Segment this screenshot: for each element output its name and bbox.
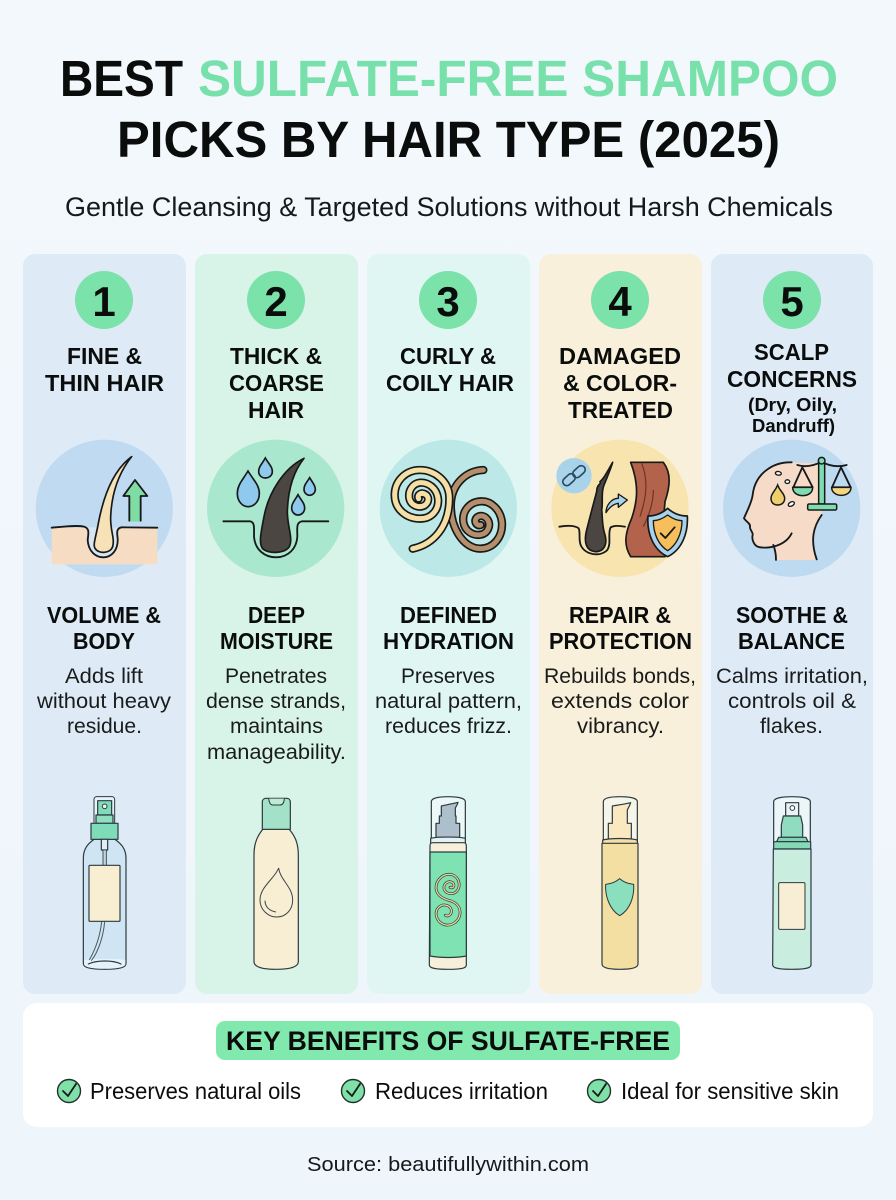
number badge 4 (591, 271, 649, 329)
icon: coarse hair with water drops (207, 440, 344, 577)
title: SULFATE-FREE SHAMPOO (198, 50, 838, 107)
description: maintains (230, 714, 323, 738)
description (544, 664, 696, 738)
subheading: defined hydration (383, 602, 514, 654)
subheading: deep moisture: DEEP (248, 602, 305, 628)
heading: thick and coarse hair (229, 343, 324, 423)
subheading: repair and protection: PROTECTION (549, 628, 692, 654)
icon: hair follicle with volume arrow (36, 440, 173, 577)
icon: damaged hair, color swatch and shield (551, 440, 689, 577)
number badge 5: 5 (780, 278, 804, 325)
description: extends color (551, 689, 689, 713)
heading: fine and thin hair: FINE & (67, 343, 142, 369)
description: without heavy (36, 689, 171, 713)
subheading: defined hydration: DEFINED (400, 602, 497, 628)
description: Calms irritation, (716, 664, 868, 688)
source line: Source: beautifullywithin.com (307, 1154, 589, 1176)
description: vibrancy. (577, 714, 664, 738)
subheading: repair and protection (549, 602, 692, 654)
heading: fine and thin hair (45, 343, 164, 396)
subheading: volume and body: VOLUME & (47, 602, 161, 628)
number badge 1: 1 (92, 278, 116, 325)
heading: scalp concerns: (Dry, Oily, (748, 394, 837, 415)
description: dense strands, (206, 689, 346, 713)
subheading: soothe and balance (736, 602, 848, 654)
description (375, 664, 522, 738)
heading: thick and coarse hair: HAIR (248, 397, 304, 423)
description: flakes. (760, 714, 823, 738)
subheading: repair and protection: REPAIR & (569, 602, 671, 628)
benefit: preserves natural oils: Preserves natural oils (90, 1078, 301, 1104)
bottle: cream with drop (254, 798, 298, 969)
panel: curly and coily hair (367, 254, 530, 994)
bottle: mint spray (773, 797, 811, 969)
subheading: deep moisture (220, 602, 333, 654)
heading: fine and thin hair: THIN HAIR (45, 370, 164, 396)
description (36, 664, 171, 738)
description: reduces frizz. (385, 714, 512, 738)
description: manageability. (207, 740, 346, 764)
bottle: golden pump with shield (602, 797, 638, 969)
heading: scalp concerns: CONCERNS (727, 366, 857, 392)
description (206, 664, 346, 764)
icon: head profile with balance scale (723, 440, 860, 577)
title: BEST (60, 50, 183, 107)
description: Penetrates (225, 664, 327, 688)
subheading: volume and body (47, 602, 161, 654)
description: Rebuilds bonds, (544, 664, 696, 688)
description: Preserves (401, 664, 495, 688)
benefit: ideal for sensitive skin: Ideal for sensitive skin (621, 1078, 839, 1104)
description: Adds lift (65, 664, 143, 688)
heading: damaged and color-treated (559, 343, 681, 423)
panel: thick and coarse hair (195, 254, 358, 994)
number badge 2 (247, 271, 305, 329)
heading: scalp concerns: SCALP (754, 339, 829, 365)
heading: thick and coarse hair: COARSE (229, 370, 324, 396)
number badge 4: 4 (608, 278, 632, 325)
icon: curly hair spirals (380, 440, 517, 577)
bottle: pump with spiral (429, 797, 466, 969)
number badge 3 (419, 271, 477, 329)
description: residue. (67, 714, 142, 738)
description: natural pattern, (375, 689, 522, 713)
number badge 5 (763, 271, 821, 329)
panel: scalp concerns (711, 254, 873, 994)
heading: damaged and color-treated: DAMAGED (559, 343, 681, 369)
description: controls oil & (728, 689, 856, 713)
subheading: volume and body: BODY (73, 628, 135, 654)
panel: damaged and color-treated hair (539, 254, 702, 994)
benefit: reduces irritation: Reduces irritation (375, 1078, 548, 1104)
heading: damaged and color-treated: TREATED (568, 397, 673, 423)
subheading: soothe and balance: BALANCE (738, 628, 845, 654)
heading: scalp concerns: Dandruff) (752, 415, 835, 436)
bottle: clear spray (83, 797, 126, 969)
heading: thick and coarse hair: THICK & (230, 343, 322, 369)
subtitle: Gentle Cleansing & Targeted Solutions without Harsh Chemicals (65, 192, 833, 222)
panel: key benefits (23, 1003, 873, 1127)
heading: scalp concerns (727, 339, 857, 436)
heading: curly and coily hair (386, 343, 514, 396)
subheading: soothe and balance: SOOTHE & (736, 602, 848, 628)
title (60, 50, 838, 168)
description (716, 664, 868, 738)
subheading: defined hydration: HYDRATION (383, 628, 514, 654)
heading: curly and coily hair: CURLY & (400, 343, 496, 369)
heading: curly and coily hair: COILY HAIR (386, 370, 514, 396)
heading: damaged and color-treated: & COLOR- (563, 370, 677, 396)
number badge 3: 3 (436, 278, 460, 325)
heading: key benefits of sulfate-free: KEY BENEFITS OF SULFATE-FREE (226, 1026, 670, 1056)
number badge 2: 2 (264, 278, 288, 325)
title: PICKS BY HAIR TYPE (2025) (117, 111, 780, 168)
subheading: deep moisture: MOISTURE (220, 628, 333, 654)
panel: fine and thin hair (23, 254, 186, 994)
number badge 1 (75, 271, 133, 329)
